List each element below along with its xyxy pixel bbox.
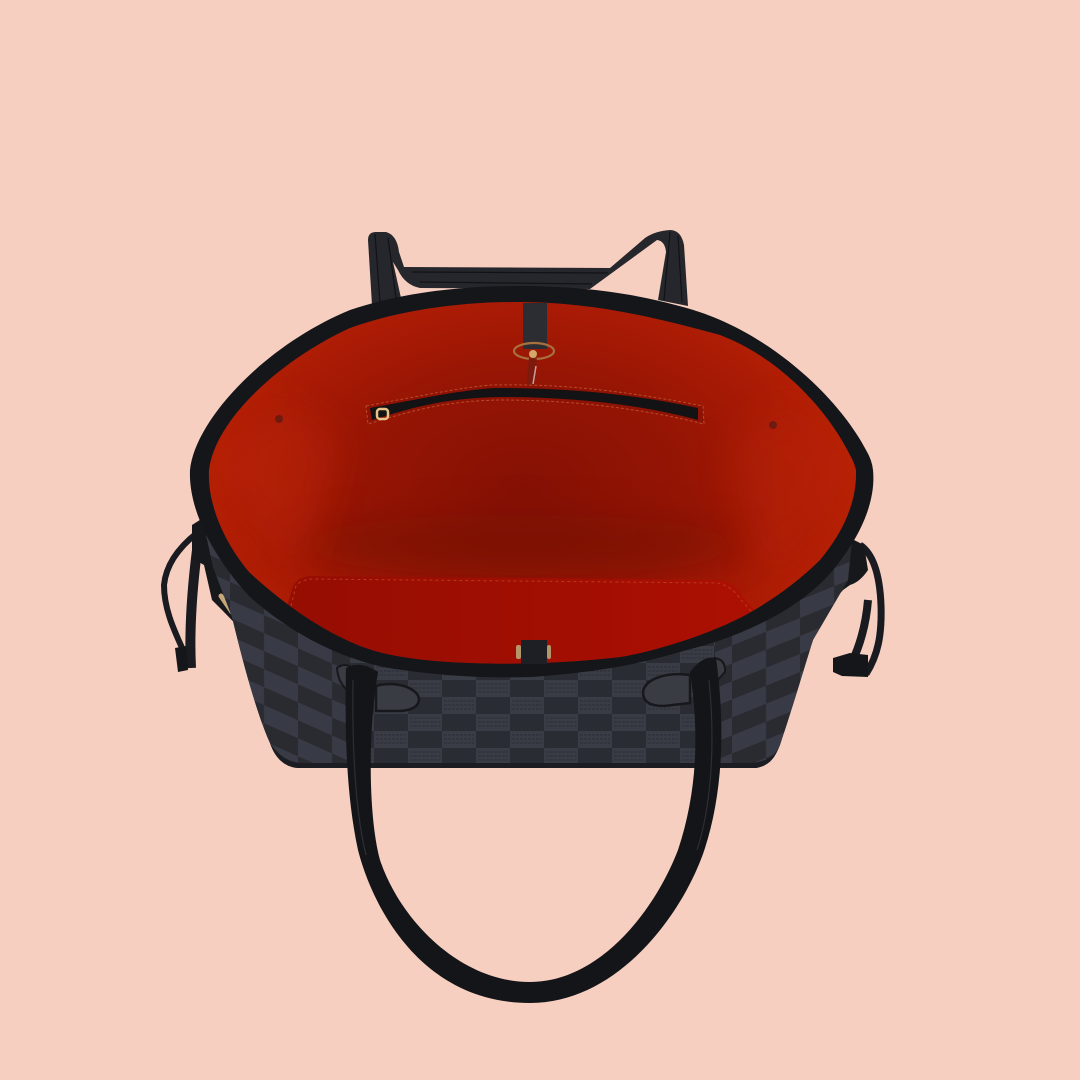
front handle xyxy=(346,658,721,1003)
lining shading: dark fold along back wall xyxy=(290,515,750,575)
illustration: open tote bag on peach background xyxy=(161,230,885,1003)
floor stitching xyxy=(291,579,752,612)
side strap left xyxy=(164,518,265,672)
rivets xyxy=(275,415,777,429)
zip pocket xyxy=(366,385,704,424)
back handle xyxy=(368,230,688,306)
lining floor xyxy=(288,576,754,664)
front handle tabs xyxy=(337,658,725,711)
upper tab and clasp xyxy=(514,303,554,388)
lining shading: bright side walls xyxy=(249,428,327,541)
side strap right xyxy=(788,538,881,677)
bag rim xyxy=(190,286,873,677)
red lining xyxy=(208,302,856,664)
lower tab xyxy=(516,640,551,664)
bag exterior: checker pattern xyxy=(205,530,852,768)
